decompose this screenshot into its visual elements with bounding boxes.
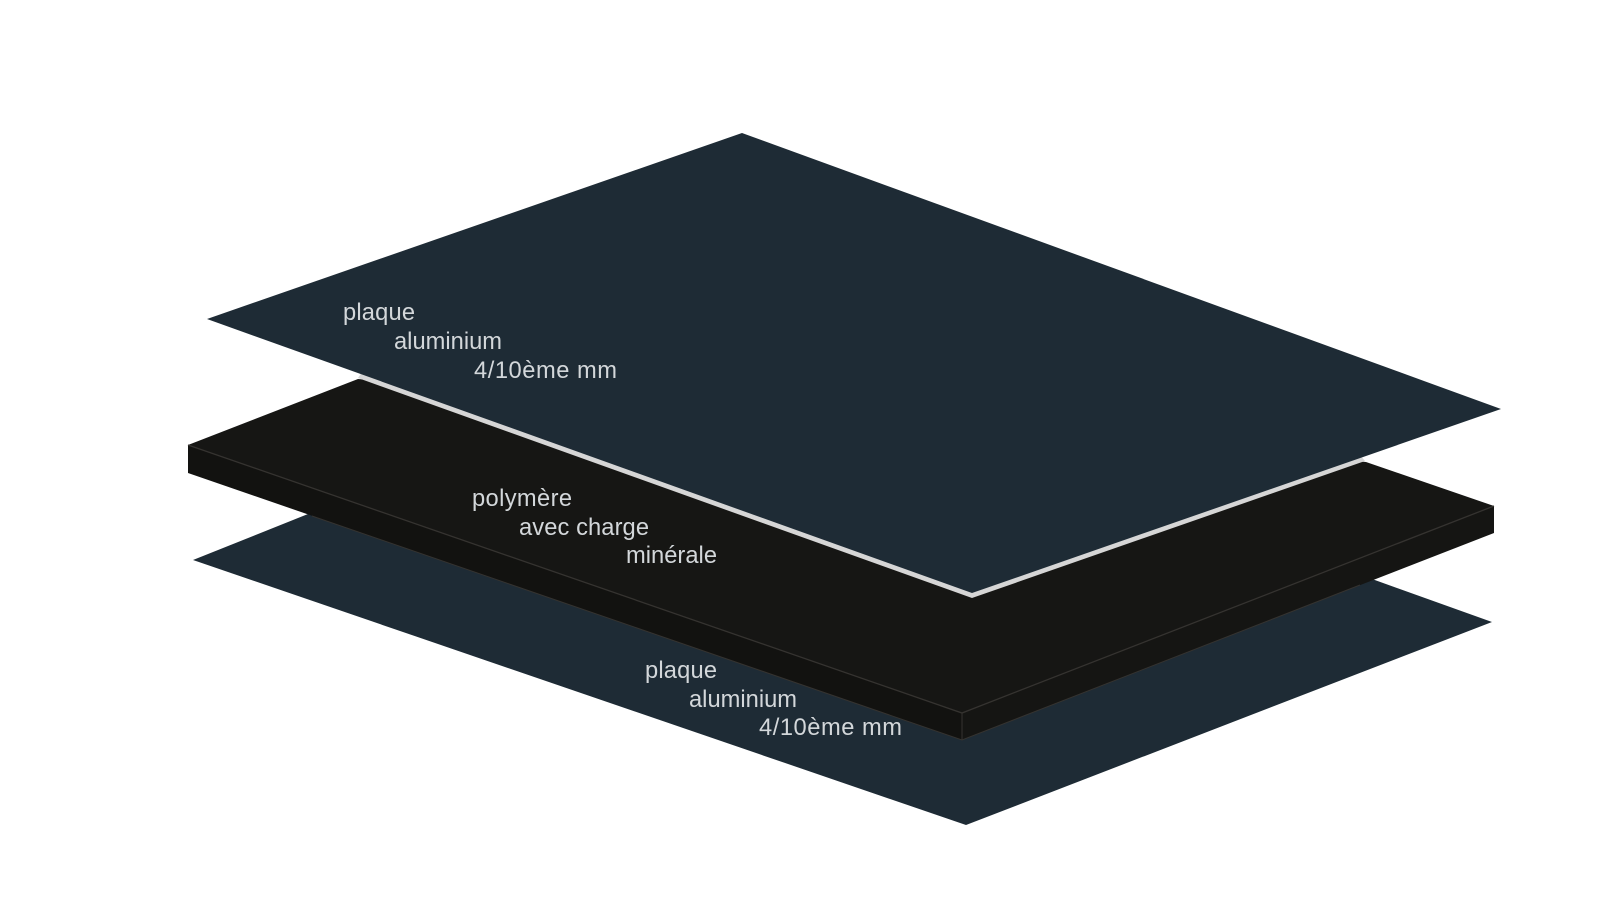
slab right side face (962, 506, 1494, 740)
polymer label (472, 486, 717, 569)
slab left side face (188, 445, 962, 740)
panel: lower aluminium plate (193, 514, 1492, 825)
polymer label: minérale (626, 543, 717, 569)
polymer label: avec charge (519, 515, 649, 541)
lower plate label (645, 658, 902, 741)
lower plate label: 4/10ème mm (759, 715, 902, 741)
light edge of upper plate (358, 372, 1365, 598)
upper plate label (343, 300, 617, 384)
lower plate label: plaque (645, 658, 717, 684)
lower plate label: aluminium (689, 687, 797, 713)
panel: upper aluminium plate (207, 133, 1501, 593)
slab top face (188, 379, 1494, 713)
polymer label: polymère (472, 486, 572, 512)
upper plate label: 4/10ème mm (474, 358, 617, 384)
panel: polymer core slab (188, 379, 1494, 740)
upper plate label: plaque (343, 300, 415, 326)
upper plate label: aluminium (394, 329, 502, 355)
